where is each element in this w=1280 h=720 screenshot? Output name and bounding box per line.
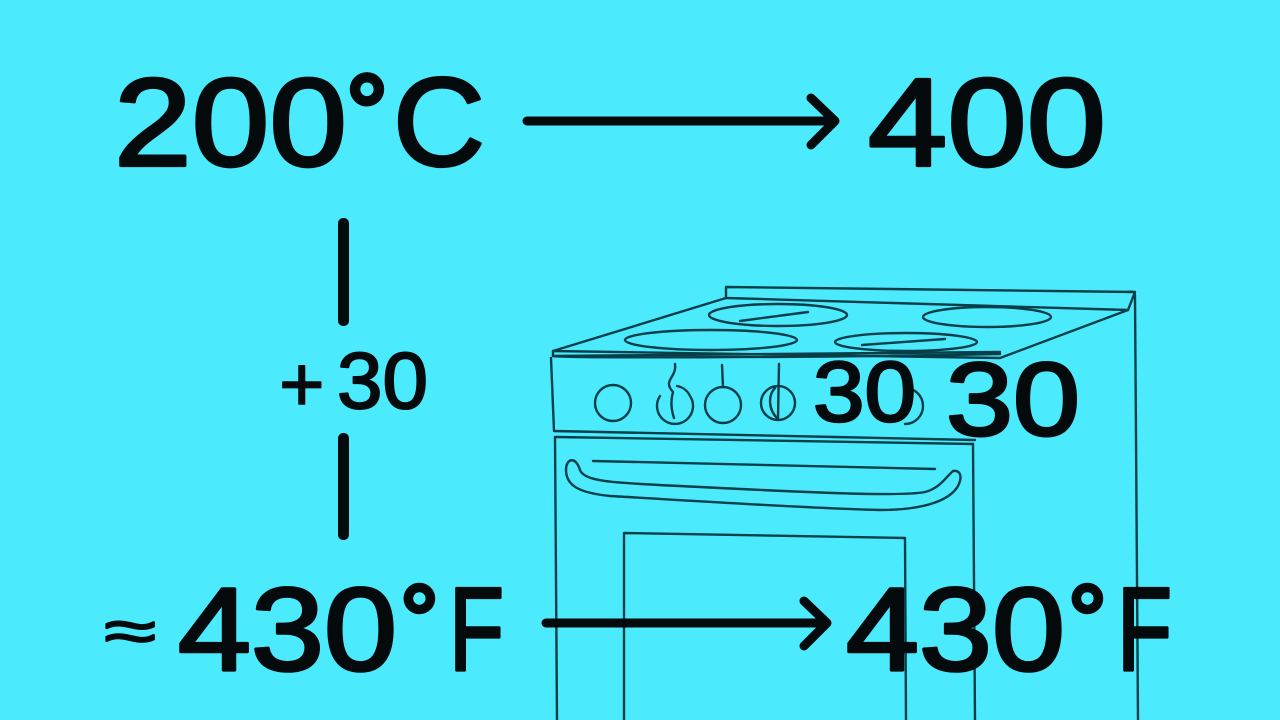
connector: lower vertical bar — [338, 433, 349, 540]
result: 430°F right — [846, 564, 1172, 696]
result: 430°F right: ° — [1068, 565, 1107, 674]
label: +30 — [279, 336, 428, 428]
connector: upper vertical bar — [338, 218, 349, 326]
result: 430°F right: 430 — [846, 564, 1065, 696]
result: 430°F left — [178, 564, 504, 696]
number: large 30: 30 — [946, 342, 1080, 458]
result: 430°F left: F — [449, 564, 504, 696]
heading: 200°C — [114, 54, 485, 192]
number: 30 on oven panel: 30 — [813, 345, 916, 440]
arrow: 430°F to 430°F — [546, 601, 827, 646]
result: 430°F left: ° — [400, 565, 439, 674]
label: +30: + — [279, 340, 325, 428]
heading: 200°C: 200 — [114, 54, 347, 192]
arrow: 200°C to 400 — [527, 98, 835, 145]
heading: 200°C: ° — [346, 54, 388, 171]
heading: 200°C: C — [393, 54, 485, 192]
result: 430°F right: F — [1117, 564, 1172, 696]
result: 400: 400 — [868, 54, 1106, 192]
approximately symbol: ≈ — [104, 597, 156, 666]
illustration: oven outline — [551, 287, 1138, 720]
label: +30: 30 — [337, 336, 428, 425]
result: 430°F left: 430 — [178, 564, 397, 696]
